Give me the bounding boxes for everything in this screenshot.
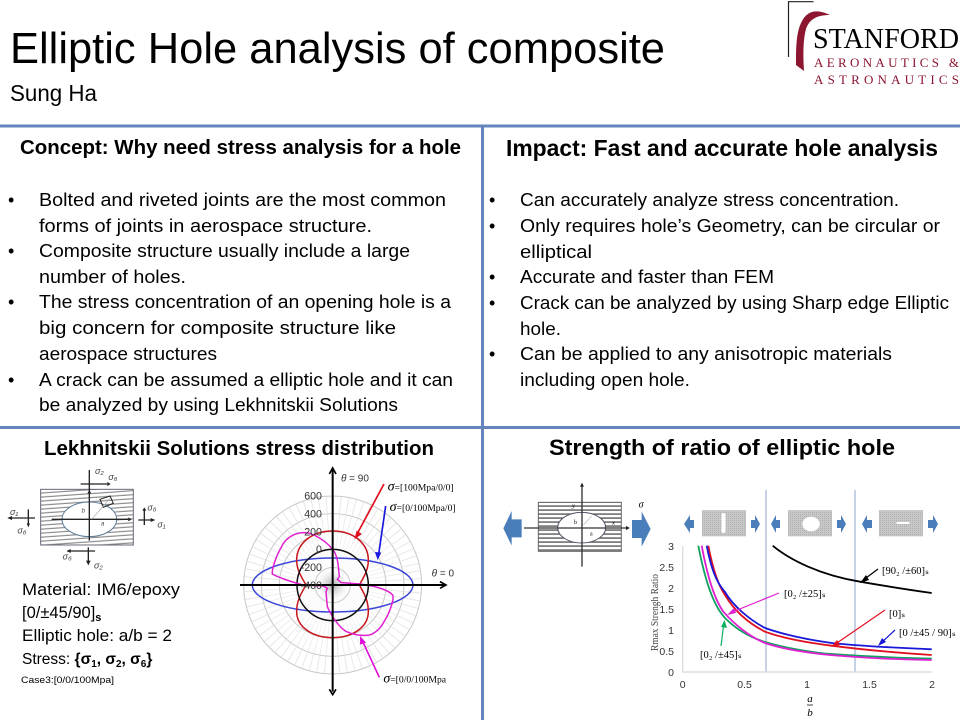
x axis ticks: 0 (680, 679, 686, 691)
text block: material and load case: 1 (91, 659, 97, 670)
bullet list: concept: The stress concentration of an opening hole is a (39, 292, 452, 312)
angle labels: θ = 0 (432, 568, 454, 579)
bullet list: impact: Can be applied to any anisotropic materials (520, 344, 892, 364)
polar grid (244, 496, 422, 674)
bullet list: concept: aerospace structures (39, 344, 217, 364)
x axis ticks: 1 (804, 679, 810, 691)
bullet list: concept: Composite structure usually include a large (39, 241, 410, 261)
callouts: [0 /±45 / 90]ₛ (899, 628, 956, 639)
radial axis labels (301, 491, 322, 592)
callout: sigma 1: σ=[100Mpa/0/0] (388, 480, 454, 495)
bullet list: concept: • (8, 241, 14, 261)
bullet list: concept (8, 190, 453, 415)
diagram: plate with elliptic hole in tension (503, 483, 651, 567)
text block: material and load case: 6 (141, 659, 147, 670)
x axis title (807, 693, 813, 719)
bullet list: impact: • (489, 216, 495, 236)
axes (683, 546, 932, 672)
angle labels: θ = 90 (341, 474, 369, 485)
series: sigma 2 blue (252, 558, 413, 612)
x axis ticks: 0.5 (737, 679, 752, 691)
chart: Rmax strength ratio vs a/b (649, 490, 956, 719)
text block: material and load case: Case3:[0/0/100Mpa] (21, 675, 114, 685)
y axis ticks: 3 (668, 541, 674, 553)
bullet list: concept: Bolted and riveted joints are the most common (39, 190, 446, 210)
text block: material and load case: , σ (97, 651, 116, 668)
angle labels (341, 474, 454, 579)
logo: Stanford Aeronautics & Astronautics: STANFORD (813, 24, 959, 55)
diagram: plate with elliptic hole under stresses (7, 466, 166, 571)
bullet list: concept: number of holes. (39, 267, 186, 287)
bullet list: concept: big concern for composite structure like (39, 318, 396, 338)
diagram: plate with elliptic hole under stresses: σ₁ (157, 519, 166, 529)
logo: Stanford Aeronautics & Astronautics (788, 2, 959, 87)
x axis ticks: 1.5 (862, 679, 877, 691)
bullet list: concept: • (8, 190, 14, 210)
radial axis labels: 0 (316, 544, 322, 556)
curves (698, 546, 932, 660)
diagram: plate with elliptic hole in tension: b (574, 520, 577, 526)
bullet list: concept: forms of joints in aerospace structure. (39, 216, 372, 236)
heading: concept: Concept: Why need stress analysis for a hole (20, 137, 461, 159)
heading: Lekhnitskii: Lekhnitskii Solutions stress distribution (44, 438, 434, 460)
heading: strength ratio: Strength of ratio of elliptic hole (549, 435, 895, 460)
radial axis labels: 400 (304, 509, 322, 521)
y axis ticks: 1.5 (659, 604, 674, 616)
icons: hole shapes with load arrows (684, 510, 938, 536)
diagram: plate with elliptic hole in tension: x (611, 520, 615, 527)
bullet list: concept: be analyzed by using Lekhnitskii Solutions (39, 395, 398, 415)
heading: impact: Impact: Fast and accurate hole analysis (506, 135, 938, 161)
callouts: [90₂ /±60]ₛ (882, 566, 929, 577)
y axis ticks: 0.5 (659, 646, 674, 658)
diagram: plate with elliptic hole under stresses: b (82, 508, 86, 514)
axes (240, 468, 446, 695)
text block: material and load case: Elliptic hole: a/b = 2 (22, 627, 172, 645)
bullet list: impact: elliptical (520, 242, 592, 262)
text block: material and load case: 2 (116, 659, 122, 670)
diagram: plate with elliptic hole under stresses: σ₂ (95, 466, 104, 476)
callouts (700, 566, 956, 661)
radial axis labels: -400 (301, 580, 322, 592)
bullet list: impact: Can accurately analyze stress concentration. (520, 190, 899, 210)
diagram: plate with elliptic hole in tension: a (590, 532, 593, 538)
region dividers (766, 490, 855, 672)
callout: sigma 6: σ=[0/0/100Mpa (383, 672, 447, 687)
y axis ticks (659, 541, 674, 679)
bullet list: impact (489, 190, 949, 390)
radial axis labels: 200 (304, 526, 322, 538)
panel: concept (8, 137, 461, 415)
diagram: plate with elliptic hole under stresses: a (101, 521, 105, 527)
x axis title: a (807, 693, 813, 705)
diagram: plate with elliptic hole under stresses: σ₂ (94, 561, 103, 571)
bullet list: impact: • (489, 267, 495, 287)
bullet list: impact: • (489, 344, 495, 364)
diagram: plate with elliptic hole under stresses: σ₁ (10, 507, 18, 517)
chart: polar stress distribution (240, 468, 456, 695)
x axis ticks (680, 679, 935, 691)
callout: sigma 2: σ=[0/100Mpa/0] (390, 500, 456, 515)
text block: material and load case: s (95, 612, 101, 624)
bullet list: concept: • (8, 370, 14, 390)
text block: material and load case: [0/±45/90] (22, 604, 95, 622)
bullet list: impact: • (489, 190, 495, 210)
y axis ticks: 2.5 (659, 562, 674, 574)
logo: Stanford Aeronautics & Astronautics: AERONAUTICS & (814, 55, 959, 70)
series: sigma 6 magenta (272, 533, 393, 635)
callout: sigma 6 (360, 636, 447, 687)
x axis ticks: 2 (929, 679, 935, 691)
series: sigma 1 red (297, 531, 368, 638)
bullet list: impact: Crack can be analyzed by using Sharp edge Elliptic (520, 293, 949, 313)
diagram: plate with elliptic hole under stresses: σ₆ (17, 525, 27, 535)
y axis ticks: 0 (668, 667, 674, 679)
diagram: plate with elliptic hole in tension: y (571, 502, 575, 509)
radial axis labels: 600 (304, 491, 322, 503)
bullet list: impact: Accurate and faster than FEM (520, 267, 774, 287)
bullet list: impact: hole. (520, 319, 561, 339)
x axis title: b (807, 707, 813, 719)
bullet list: impact: including open hole. (520, 370, 690, 390)
diagram: plate with elliptic hole in tension: σ (639, 499, 645, 510)
arrow: left load (503, 511, 522, 546)
text block: material and load case (21, 581, 181, 685)
callouts: [0₂ /±45]ₛ (700, 650, 742, 661)
diagram: plate with elliptic hole under stresses: σ₆ (147, 503, 157, 513)
y axis title: Rmax Strengh Ratio (649, 574, 661, 651)
callouts: [0₂ /±25]ₛ (784, 589, 826, 600)
diagram: plate with elliptic hole under stresses: σ₆ (108, 472, 118, 482)
author: Sung Ha (10, 80, 97, 106)
callout: sigma 2 (375, 500, 456, 560)
callout: sigma 1 (354, 480, 454, 539)
radial axis labels: -200 (301, 562, 322, 574)
arrow: right load (632, 512, 651, 547)
bullet list: impact: • (489, 293, 495, 313)
text block: material and load case: } (146, 651, 152, 668)
text block: material and load case: Material: IM6/epoxy (22, 581, 181, 599)
callouts: [0]ₛ (889, 609, 905, 620)
series: zero circle black (297, 549, 368, 621)
text block: material and load case: Stress: {σ (22, 651, 91, 668)
bullet list: impact: Only requires hole’s Geometry, can be circular or (520, 216, 940, 236)
logo: Stanford Aeronautics & Astronautics: ASTRONAUTICS (814, 72, 959, 87)
text block: material and load case: , σ (122, 651, 141, 668)
bullet list: concept: A crack can be assumed a elliptic hole and it can (39, 370, 453, 390)
y axis ticks: 2 (668, 583, 674, 595)
panel: impact (489, 135, 949, 390)
bullet list: concept: • (8, 292, 14, 312)
title: Elliptic Hole analysis of composite (10, 24, 665, 73)
y axis ticks: 1 (668, 625, 674, 637)
diagram: plate with elliptic hole under stresses: σ₆ (63, 551, 72, 561)
